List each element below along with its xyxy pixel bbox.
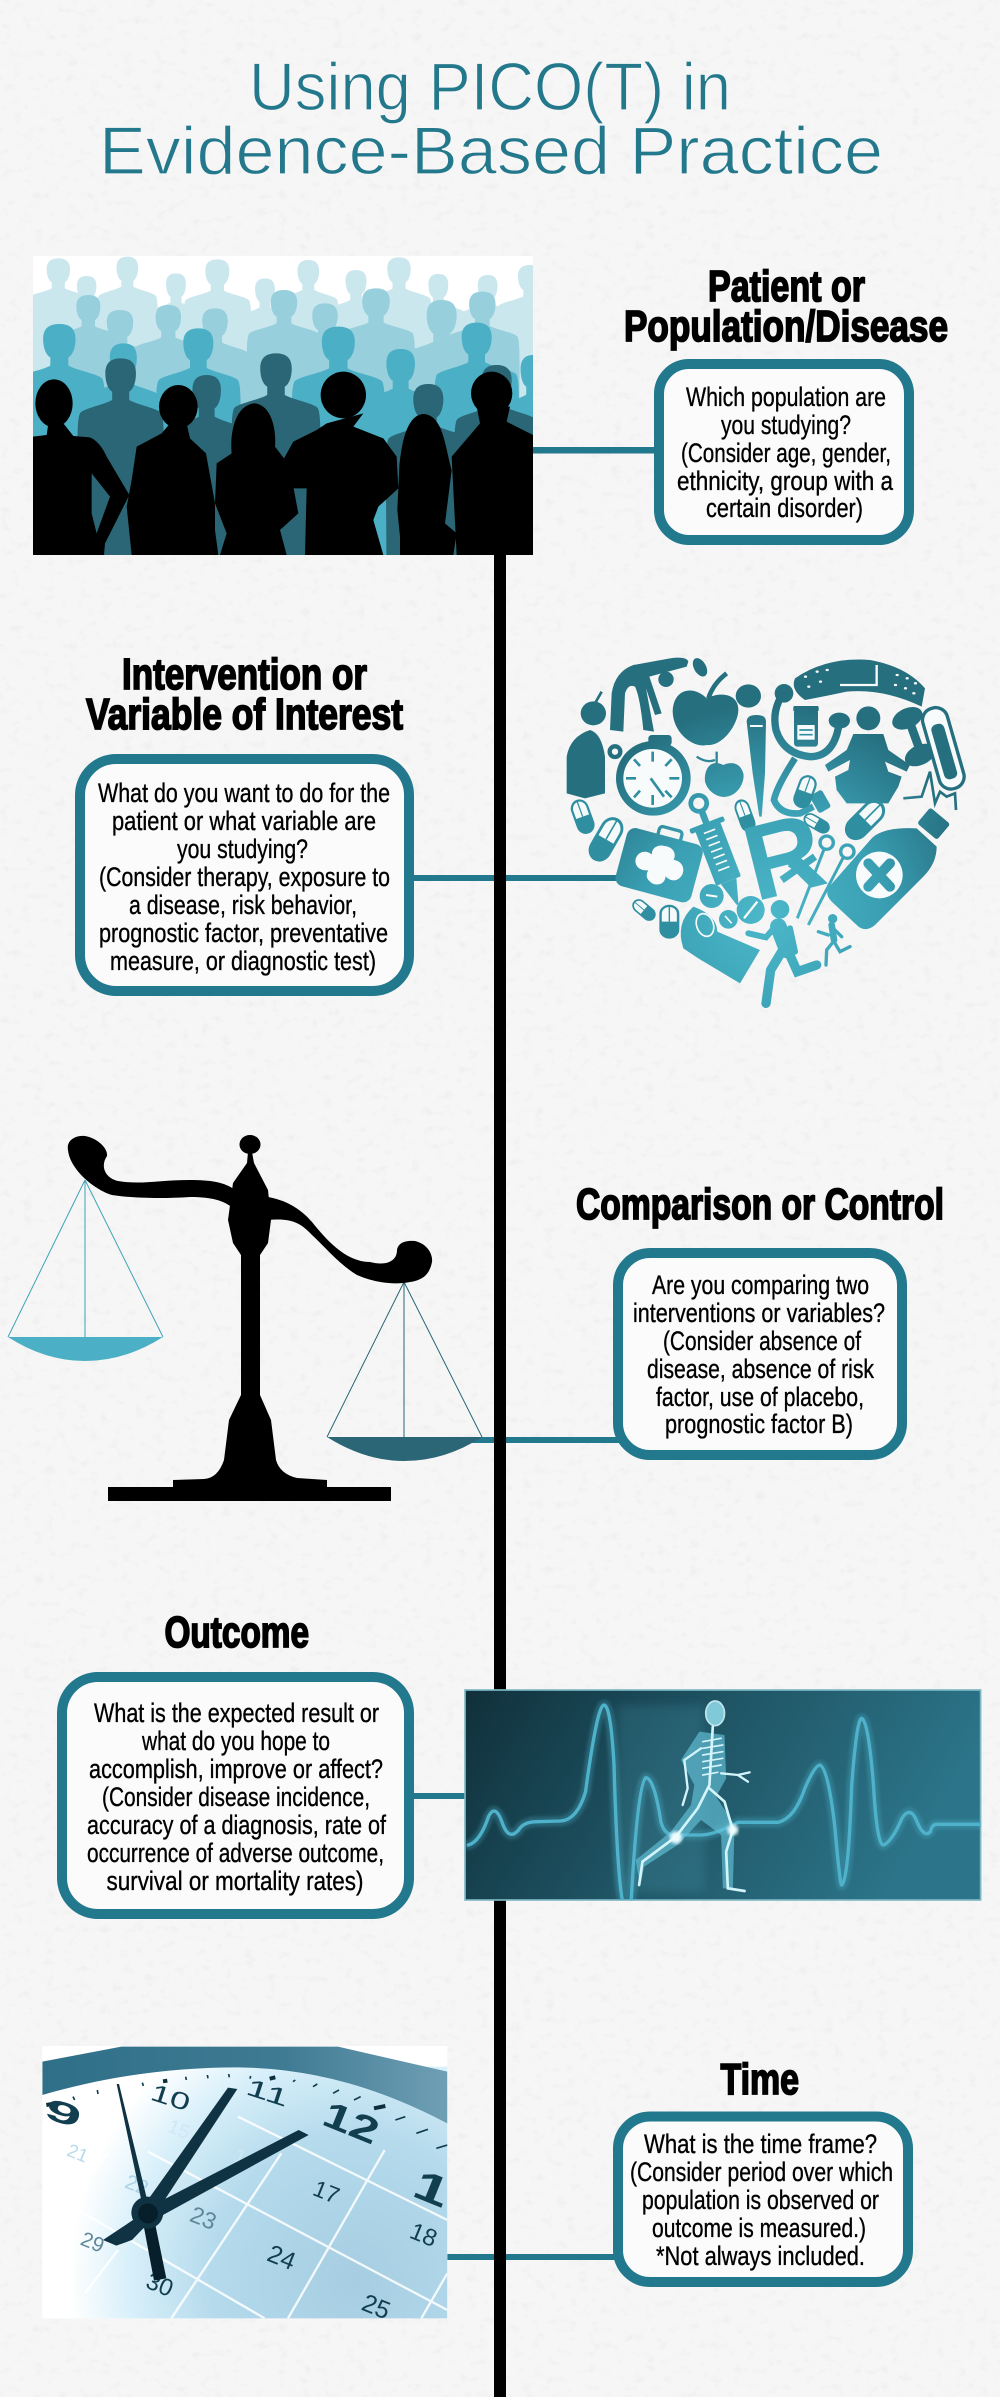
icon: bending person (610, 658, 688, 732)
icon: digital thermometer (920, 705, 967, 792)
clock hands (103, 2084, 309, 2281)
icon: large runner (748, 900, 817, 1003)
heading: Variable of Interest (86, 690, 403, 739)
icon: big apple (673, 656, 738, 745)
callout box: Which population are (686, 382, 886, 412)
clock numerals: 22 (122, 2170, 152, 2200)
heading: Outcome (164, 1608, 309, 1657)
clock numerals (47, 2081, 443, 2318)
clock numerals: 29 (77, 2228, 107, 2258)
callout box: prognostic factor B) (665, 1409, 853, 1439)
clock numerals: 18 (406, 2218, 441, 2253)
clock numerals: 30 (142, 2268, 177, 2303)
callout box: a disease, risk behavior, (129, 890, 357, 920)
callout box: (Consider age, gender, (681, 438, 891, 468)
callout box (80, 759, 409, 991)
skeleton runner (617, 1701, 750, 1892)
clock numerals: 15 (165, 2116, 193, 2144)
icon: first aid kit (614, 818, 707, 904)
icon: pulse line (903, 772, 956, 810)
clock numerals: 17 (309, 2175, 343, 2209)
icon: capsules (570, 774, 888, 937)
callout box: measure, or diagnostic test) (110, 946, 376, 976)
icon: Rx symbol: R (732, 789, 836, 924)
connector (530, 447, 658, 454)
callout box: you studying? (177, 834, 308, 864)
title: Using PICO(T) in (249, 49, 731, 125)
callout box: population is observed or (642, 2185, 879, 2215)
icon: balance scale (8, 1135, 482, 1501)
icon: stethoscope (774, 684, 850, 814)
panel: patient or population (33, 256, 948, 555)
clock numerals: 12 (317, 2093, 385, 2152)
minute ticks (73, 2074, 447, 2148)
callout box: accuracy of a diagnosis, rate of (87, 1810, 386, 1840)
callout box: patient or what variable are (112, 806, 376, 836)
callout box (618, 2116, 908, 2282)
heading: Patient or (708, 262, 865, 311)
clock numerals: 11 (243, 2074, 292, 2113)
icon: medicine bottle (827, 807, 950, 929)
clock numerals: 23 (187, 2201, 220, 2235)
right pan (327, 1282, 482, 1461)
callout box: prognostic factor, preventative (99, 918, 388, 948)
panel: intervention (80, 650, 967, 1003)
image: ECG with running skeleton (465, 1690, 981, 1908)
callout box: occurrence of adverse outcome, (87, 1838, 384, 1868)
icon: small gear (610, 746, 620, 757)
callout box: you studying? (721, 410, 851, 440)
heading: Time (720, 2055, 799, 2104)
icon: stopwatch (616, 735, 691, 816)
callout box: accomplish, improve or affect? (89, 1754, 383, 1784)
clock numerals: 1 (407, 2160, 457, 2217)
callout box: disease, absence of risk (647, 1354, 874, 1384)
icon: bandage (794, 660, 925, 707)
clock numerals: 1 (231, 2146, 249, 2169)
vertical timeline (494, 554, 506, 2397)
title: Evidence-Based Practice (99, 113, 883, 189)
heading (624, 262, 948, 351)
callout box: *Not always included. (656, 2241, 865, 2271)
stand and beam (68, 1135, 432, 1501)
connector (410, 875, 620, 881)
clock numerals: 24 (263, 2240, 300, 2276)
callout box: certain disorder) (706, 493, 863, 523)
callout box: Are you comparing two (652, 1270, 869, 1300)
callout box: What do you want to do for the (98, 778, 390, 808)
icon: small runner (818, 914, 850, 965)
callout box: What is the expected result or (94, 1698, 379, 1728)
icon: bandage roll (681, 907, 760, 983)
icon: jar (567, 730, 605, 798)
panel: comparison (8, 1135, 944, 1501)
connector (445, 2254, 620, 2260)
icon: lower apple (697, 752, 744, 797)
left pan (8, 1180, 163, 1361)
icon: small apple (581, 692, 606, 725)
callout box: outcome is measured.) (652, 2213, 866, 2243)
callout box (618, 1253, 902, 1455)
panel: outcome (62, 1608, 981, 1914)
heading (86, 650, 403, 739)
calendar grid (84, 2116, 448, 2318)
heading: Intervention or (122, 650, 367, 699)
icon: top apple (736, 684, 761, 708)
icon: round tablets (700, 884, 765, 929)
callout box: (Consider therapy, exposure to (99, 862, 390, 892)
callout box: survival or mortality rates) (106, 1866, 364, 1896)
icon: medical heart (567, 656, 967, 1003)
callout box: what do you hope to (141, 1726, 330, 1756)
connector (410, 1793, 466, 1799)
callout box (62, 1677, 409, 1914)
title (99, 49, 883, 189)
callout box: factor, use of placebo, (656, 1382, 864, 1412)
icon: syringe (679, 789, 755, 911)
icon: thermometer (747, 715, 766, 817)
clock numerals: 25 (358, 2289, 394, 2325)
callout box: (Consider period over which (630, 2157, 893, 2187)
icon: meditating person (825, 706, 910, 803)
callout box: (Consider disease incidence, (102, 1782, 370, 1812)
panel: time (38, 2046, 908, 2325)
icon: forceps (797, 836, 854, 925)
callout box: interventions or variables? (633, 1298, 885, 1328)
callout box: What is the time frame? (644, 2129, 877, 2159)
callout box: ethnicity, group with a (677, 466, 894, 496)
icon: dumbbell (889, 703, 939, 771)
clock numerals: 21 (64, 2139, 91, 2167)
image: crowd silhouettes (33, 256, 533, 555)
callout box (659, 364, 909, 540)
clock numerals: 10 (147, 2079, 194, 2117)
callout box: (Consider absence of (663, 1326, 861, 1356)
connector (470, 1437, 620, 1443)
image: clock face (38, 2046, 457, 2325)
icon: pill bottle (793, 706, 819, 747)
clock numerals: 9 (41, 2092, 86, 2135)
